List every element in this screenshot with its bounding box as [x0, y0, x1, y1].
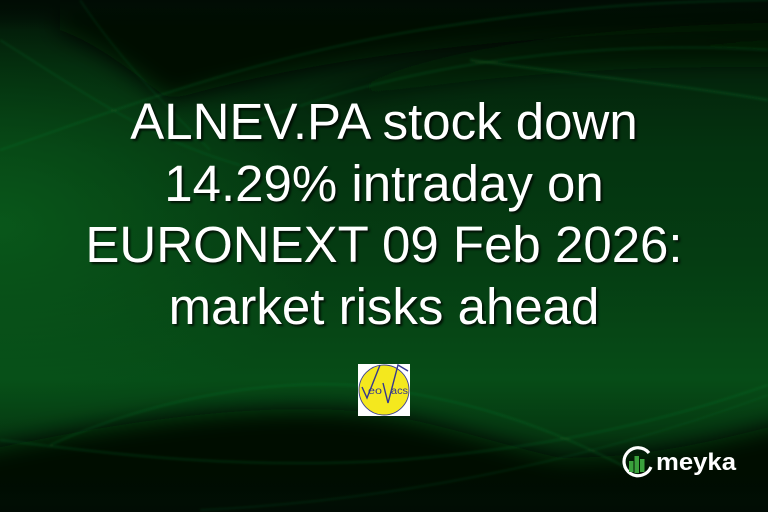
logo: meyka [622, 446, 737, 478]
wordmark: meyka [656, 449, 737, 476]
icon: NeoVacs company logo [358, 364, 410, 416]
title: ALNEV.PA stock down [130, 93, 638, 150]
title: 14.29% intraday on [164, 154, 604, 212]
icon: meyka ring with bars [624, 448, 651, 476]
title [85, 93, 683, 334]
title: market risks ahead [169, 278, 599, 334]
title: EURONEXT 09 Feb 2026: [85, 216, 683, 273]
icon: NeoVacs company logo: eo [368, 386, 383, 397]
icon: NeoVacs company logo: acs [391, 386, 408, 397]
